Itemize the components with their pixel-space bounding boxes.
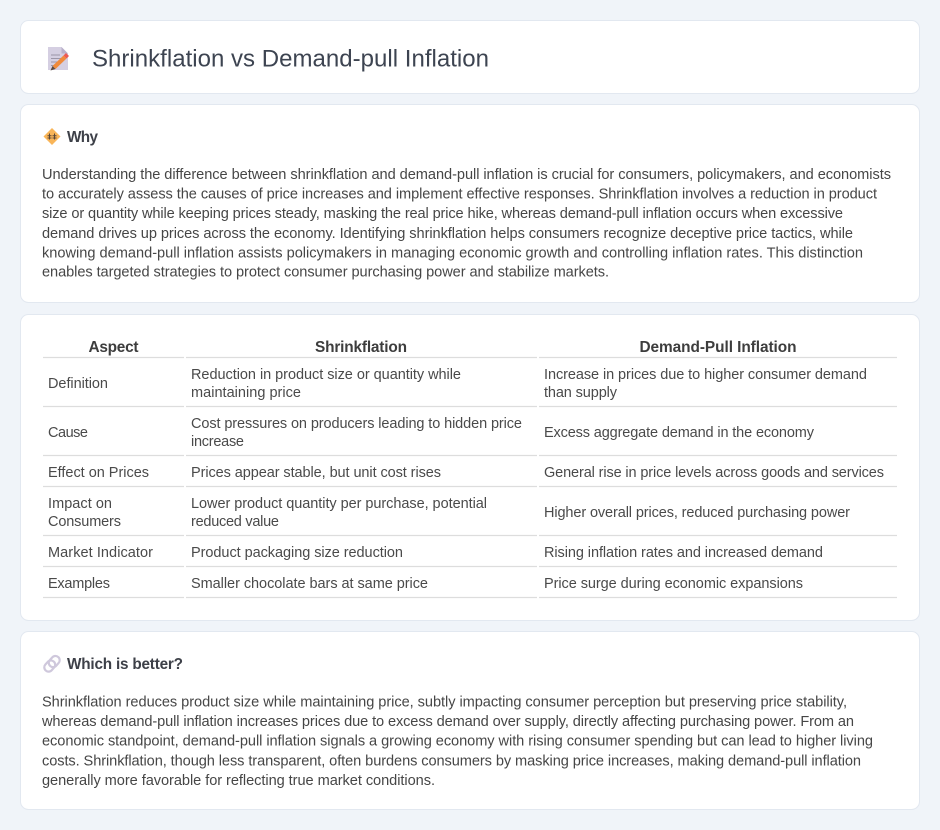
- text block: which is better paragraph: economic standpoint, demand-pull inflation signals a growing economy with rising consumer spending but can lead to higher living: [42, 734, 873, 750]
- table row: impact on consumers: Impact on: [48, 496, 112, 512]
- table header row: Demand-Pull Inflation: [640, 339, 796, 356]
- table row: examples: Examples: [48, 576, 110, 592]
- text block: which is better paragraph: costs. Shrinkflation, though less transparent, often burdens consumers by masking price increases, making demand-pull inflation: [42, 753, 861, 769]
- panel: why: [20, 104, 920, 302]
- heading: why: Why: [67, 129, 98, 146]
- panel: which is better: [20, 632, 920, 810]
- text block: why paragraph: enables targeted strategies to protect consumer purchasing power and stabilize markets.: [42, 264, 609, 280]
- heading: which is better: Which is better?: [67, 656, 183, 673]
- table row: cause: Cause: [48, 425, 88, 441]
- table row: examples: Smaller chocolate bars at same price: [191, 576, 428, 592]
- table row: definition: Definition: [48, 376, 108, 392]
- icon: chain link: [43, 654, 61, 673]
- table row: effect on prices: [48, 465, 884, 481]
- table row: impact on consumers: Consumers: [48, 514, 121, 530]
- table row: impact on consumers: reduced value: [191, 514, 279, 530]
- table row: definition: Increase in prices due to higher consumer demand: [544, 367, 867, 383]
- table row: market indicator: Rising inflation rates and increased demand: [544, 545, 823, 561]
- table row: definition: maintaining price: [191, 385, 301, 401]
- table row: market indicator: [48, 545, 823, 561]
- text block: which is better paragraph: generally more favorable for reflecting true market conditions.: [42, 773, 435, 789]
- table row: effect on prices: General rise in price levels across goods and services: [544, 465, 884, 481]
- table header row: Aspect: [88, 339, 138, 356]
- table row: cause: Cost pressures on producers leading to hidden price: [191, 416, 522, 432]
- text block: why paragraph: [42, 167, 891, 280]
- table row: cause: Excess aggregate demand in the economy: [544, 425, 815, 441]
- icon: document with pencil: [48, 47, 69, 70]
- table header row: Shrinkflation: [315, 339, 407, 356]
- table row: cause: [48, 416, 815, 450]
- title: Shrinkflation vs Demand-pull Inflation: [92, 46, 489, 72]
- table row: cause: increase: [191, 434, 244, 450]
- table row: definition: Reduction in product size or quantity while: [191, 367, 461, 383]
- table row: definition: [48, 367, 867, 401]
- text block: why paragraph: demand drives up prices across the economy. Identifying shrinkflation helps consumers recognize deceptive price tactics, while: [42, 226, 853, 242]
- table header row: [88, 339, 796, 356]
- table row: impact on consumers: [48, 496, 850, 530]
- text block: why paragraph: Understanding the difference between shrinkflation and demand-pull inflation is crucial for consumers, policymakers, and economists: [42, 167, 891, 183]
- table row: effect on prices: Prices appear stable, but unit cost rises: [191, 465, 441, 481]
- text block: which is better paragraph: Shrinkflation reduces product size while maintaining price, subtly impacting consumer perception but preserving price stability,: [42, 694, 847, 710]
- text block: which is better paragraph: [41, 694, 873, 789]
- icon: warning diamond: [44, 128, 60, 145]
- text block: which is better paragraph: whereas demand-pull inflation increases prices due to excess demand over supply, directly affecting purchasing power. From an: [41, 714, 854, 730]
- panel: page header: [20, 20, 920, 94]
- table row: market indicator: Market Indicator: [48, 545, 153, 561]
- panel: comparison table: [20, 314, 920, 620]
- table row: examples: [48, 576, 803, 592]
- table row: definition: than supply: [544, 385, 618, 401]
- table row: impact on consumers: Higher overall prices, reduced purchasing power: [544, 505, 850, 521]
- table row: effect on prices: Effect on Prices: [48, 465, 149, 481]
- table row: examples: Price surge during economic expansions: [544, 576, 803, 592]
- text block: why paragraph: size or quantity while keeping prices steady, masking the real price hike, whereas demand-pull inflation occurs when excessive: [42, 206, 843, 222]
- table row: impact on consumers: Lower product quantity per purchase, potential: [191, 496, 487, 512]
- text block: why paragraph: knowing demand-pull inflation assists policymakers in managing economic growth and controlling inflation rates. This distinction: [42, 245, 863, 261]
- text block: why paragraph: to accurately assess the causes of price increases and implement effective responses. Shrinkflation involves a reduction in product: [42, 187, 877, 203]
- table row: market indicator: Product packaging size reduction: [191, 545, 403, 561]
